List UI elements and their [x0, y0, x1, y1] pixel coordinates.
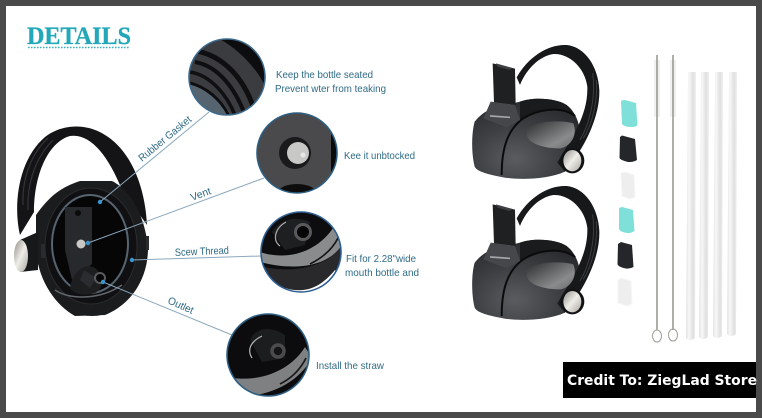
detail circle: screw thread	[260, 211, 345, 296]
text: vent description: Kee it unbtocked	[344, 150, 415, 162]
callout line: rubber gasket: Rubber Gasket	[136, 114, 194, 164]
callout line: rubber gasket	[98, 112, 209, 204]
drinking straws	[686, 72, 737, 340]
callout line: outlet: Outlet	[166, 295, 195, 317]
text: thread description: Fit for 2.28"wide	[346, 253, 416, 265]
text: gasket description: Prevent wter from teaking	[275, 83, 386, 95]
text: thread description	[345, 253, 419, 279]
detail circle: gasket	[185, 36, 266, 118]
silicone mouthpieces: second set	[618, 207, 634, 306]
product: bottle cap bottom	[472, 186, 599, 320]
callout line: screw thread: Scew Thread	[175, 245, 229, 259]
text: gasket description: Keep the bottle seated	[276, 69, 373, 81]
product: bottle cap top	[472, 45, 599, 179]
text: gasket description	[275, 69, 386, 95]
detail circle: vent	[256, 112, 338, 194]
text: outlet description: Install the straw	[316, 360, 384, 372]
credit banner: Credit To: ZiegLad Store	[567, 373, 757, 389]
title: DETAILS	[27, 23, 131, 50]
cleaning brushes	[652, 55, 678, 342]
product: cap underside with handle	[14, 127, 149, 316]
text: thread description: mouth bottle and	[345, 267, 419, 279]
callout line: outlet	[101, 280, 232, 335]
callout line: screw thread	[130, 245, 261, 262]
callout line: vent: Vent	[189, 185, 213, 204]
credit banner	[563, 362, 757, 398]
detail circle: outlet	[226, 313, 312, 397]
callout line: vent	[86, 178, 264, 245]
silicone mouthpieces: first set	[620, 100, 638, 199]
